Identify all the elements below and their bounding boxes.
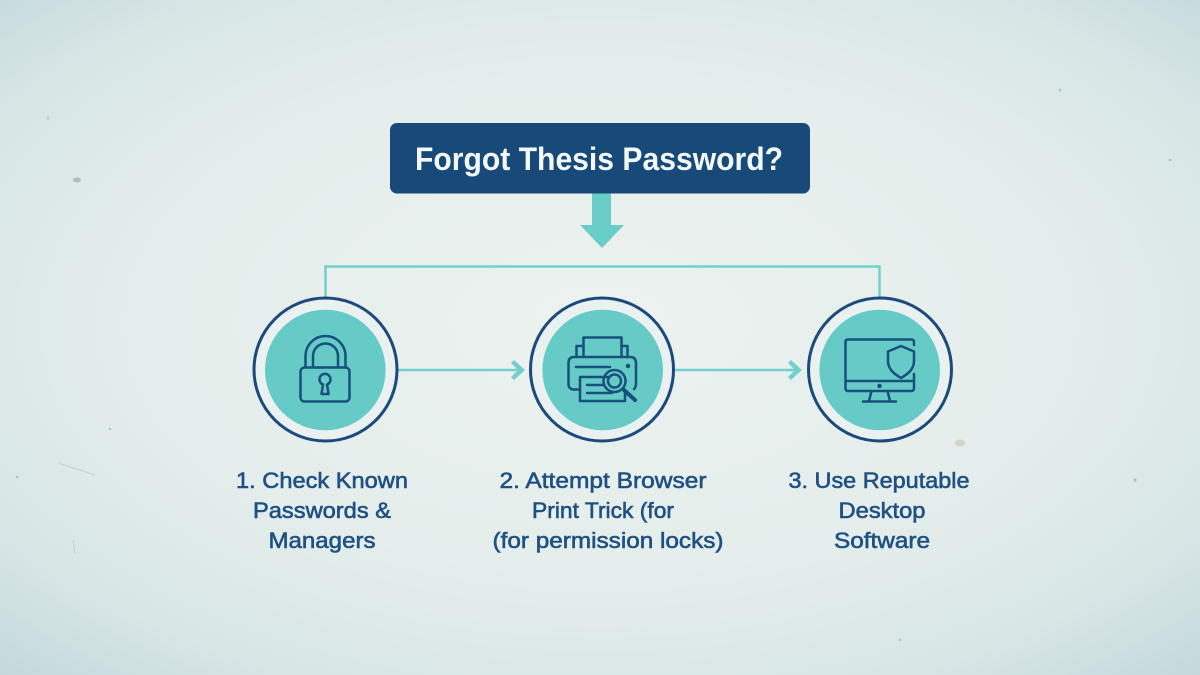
icon: printer with magnifier [568,338,636,401]
step 1: lock circle [254,298,397,441]
step 3 label: Desktop [838,498,926,523]
step 1 label [236,468,408,553]
step 2 label [492,468,724,553]
step 2 label: (for permission locks) [492,528,724,553]
icon: desktop monitor with shield [846,340,914,402]
arrow: title down to bracket [580,193,624,248]
arrow: step 1 to step 2 [398,360,525,380]
step 1 label: 1. Check Known [236,468,408,493]
step 2: printer circle [530,298,674,441]
title box [390,123,810,194]
step 1 label: Passwords & [253,498,391,523]
step 3: monitor circle [808,298,952,441]
step 3 label: 3. Use Reputable [788,468,970,493]
step 3 label: Software [834,528,930,553]
connector: bracket from arrow to first and third steps [326,266,880,297]
step 2 label: Print Trick (for [532,498,675,523]
step 2 label: 2. Attempt Browser [500,468,707,493]
arrow: step 2 to step 3 [675,360,802,380]
icon: padlock [300,336,350,402]
step 3 label [788,468,970,553]
heading: Forgot Thesis Password? [415,141,783,177]
step 1 label: Managers [268,528,376,553]
